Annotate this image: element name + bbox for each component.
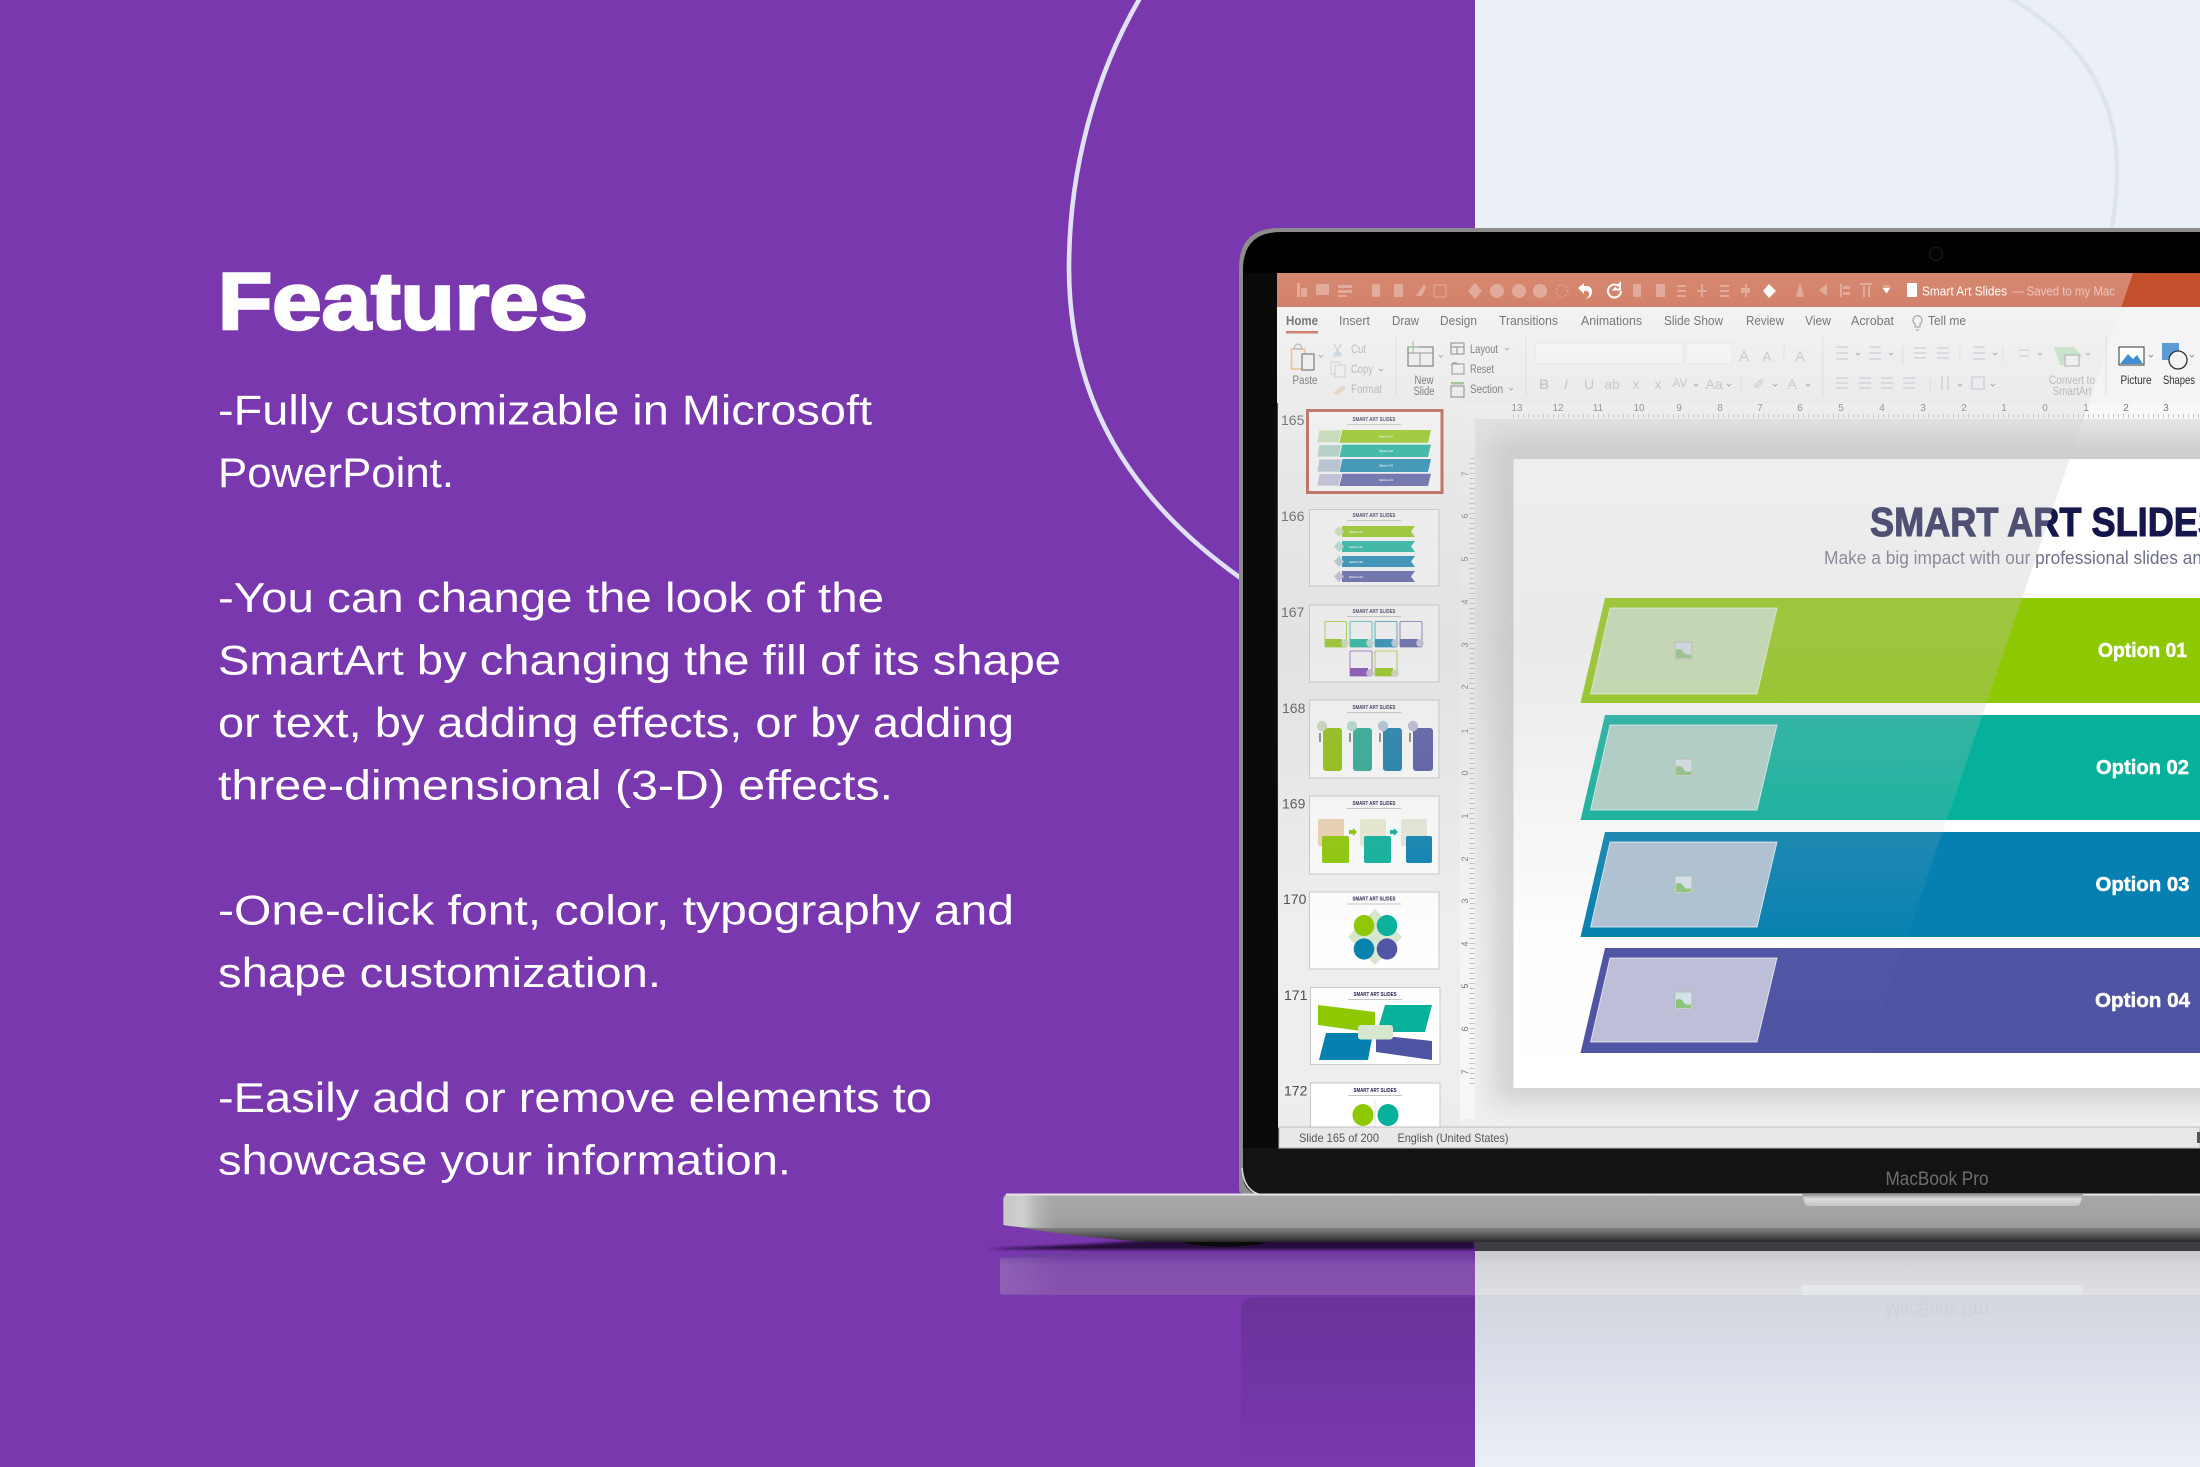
ribbon tabs: Review bbox=[1746, 313, 1785, 328]
font group: U bbox=[1584, 376, 1594, 392]
thumbnail 165: Option 02 bbox=[1379, 449, 1393, 453]
text block: feature list: shape customization. bbox=[218, 949, 661, 996]
thumb notch bbox=[1802, 1194, 2083, 1206]
font group: A bbox=[1763, 349, 1772, 364]
font group: B bbox=[1539, 376, 1549, 392]
ribbon tabs: Slide Show bbox=[1664, 313, 1724, 328]
vertical ruler: 2 bbox=[1460, 684, 1470, 690]
thumbnail 165: Option 03 bbox=[1379, 464, 1393, 468]
paragraph group bbox=[1836, 347, 2029, 390]
ribbon tabs: Transitions bbox=[1499, 313, 1558, 328]
text block: feature list: SmartArt by changing the fill of its shape bbox=[218, 636, 1061, 684]
laptop base bbox=[985, 1194, 2200, 1251]
horizontal ruler: 4 bbox=[1879, 403, 1885, 414]
camera bbox=[1930, 248, 1942, 260]
thumbnail 168: SMART ART SLIDES bbox=[1352, 705, 1396, 711]
thumbnail 168 bbox=[1310, 700, 1439, 778]
font group: I bbox=[1564, 376, 1568, 392]
horizontal ruler: 9 bbox=[1676, 403, 1682, 414]
thumbnail 170 bbox=[1310, 892, 1439, 969]
font group: A bbox=[1739, 348, 1749, 365]
ribbon tabs: Tell me bbox=[1928, 313, 1966, 328]
curve: pale outline on light panel bbox=[2010, 0, 2117, 232]
ribbon tabs: Draw bbox=[1392, 313, 1420, 328]
slides group: Section bbox=[1470, 384, 1503, 396]
slide numbers: 168 bbox=[1282, 700, 1306, 716]
horizontal ruler: 0 bbox=[2042, 403, 2048, 414]
thumbnail 167: SMART ART SLIDES bbox=[1352, 609, 1396, 615]
slide numbers: 170 bbox=[1283, 891, 1307, 907]
slides group: Layout bbox=[1470, 344, 1499, 356]
thumbnail 166: Option 01 bbox=[1349, 530, 1363, 534]
vertical ruler: 3 bbox=[1460, 898, 1470, 904]
slide numbers: 167 bbox=[1281, 604, 1305, 620]
text block: feature list: -One-click font, color, typography and bbox=[218, 886, 1014, 934]
band: option 02 bbox=[1580, 715, 2200, 820]
status bar: Slide 165 of 200 bbox=[1299, 1131, 1379, 1145]
vertical ruler: 4 bbox=[1460, 599, 1470, 605]
slides group: Slide bbox=[1414, 386, 1434, 398]
ribbon chevrons bbox=[1319, 348, 2194, 390]
text block: feature list bbox=[218, 386, 1061, 1184]
status bar: English (United States) bbox=[1398, 1131, 1508, 1145]
curve: white outline on purple bbox=[1069, 0, 1242, 579]
horizontal ruler: 6 bbox=[1797, 403, 1803, 414]
vertical ruler: 5 bbox=[1460, 556, 1470, 562]
horizontal ruler: 8 bbox=[1717, 403, 1723, 414]
title bar: — Saved to my Mac bbox=[2012, 284, 2115, 298]
thumbnail 171 bbox=[1310, 988, 1440, 1064]
thumbnail 166 bbox=[1310, 510, 1439, 586]
font group: ab bbox=[1604, 376, 1620, 392]
thumbnail 171: SMART ART SLIDES bbox=[1354, 992, 1397, 998]
band: option 04 bbox=[1580, 948, 2200, 1053]
heading: Features: Features bbox=[218, 257, 588, 347]
slide numbers: 165 bbox=[1281, 412, 1305, 428]
horizontal ruler: 5 bbox=[1838, 403, 1844, 414]
slide numbers bbox=[1281, 412, 1308, 1098]
clipboard group bbox=[1292, 344, 1383, 396]
horizontal ruler: 2 bbox=[1961, 403, 1967, 414]
thumbnail 172: SMART ART SLIDES bbox=[1354, 1088, 1397, 1094]
ribbon tabs: Insert bbox=[1339, 313, 1370, 328]
horizontal ruler: 13 bbox=[1511, 403, 1523, 414]
vertical ruler bbox=[1460, 419, 1475, 1119]
text block: feature list: showcase your information. bbox=[218, 1136, 791, 1184]
font group: AV bbox=[1672, 376, 1688, 390]
vertical ruler: 6 bbox=[1460, 513, 1470, 519]
base top slab bbox=[1003, 1194, 2200, 1228]
vertical ruler: 7 bbox=[1460, 471, 1470, 477]
band: option 01 bbox=[1580, 598, 2200, 703]
horizontal ruler: 1 bbox=[2083, 403, 2089, 414]
text block: feature list: PowerPoint. bbox=[218, 449, 454, 496]
vertical ruler: 5 bbox=[1460, 983, 1470, 989]
vertical ruler: 0 bbox=[1460, 770, 1470, 776]
font group: Aa bbox=[1705, 376, 1723, 392]
ribbon tabs: Acrobat bbox=[1851, 313, 1894, 328]
slide numbers: 172 bbox=[1284, 1082, 1308, 1098]
thumbnail 166: Option 02 bbox=[1349, 545, 1363, 549]
main slide bbox=[1514, 459, 2200, 1088]
icon: tell me bulb bbox=[1913, 316, 1922, 330]
thumbnail sidebar bbox=[1278, 403, 1460, 1128]
horizontal ruler: 10 bbox=[1633, 403, 1645, 414]
slides group bbox=[1407, 341, 1503, 398]
horizontal ruler: 3 bbox=[2163, 403, 2169, 414]
thumbnail 165: Option 01 bbox=[1379, 434, 1393, 438]
clipboard group: Paste bbox=[1292, 373, 1318, 387]
thumbnail 166: Option 04 bbox=[1349, 575, 1363, 579]
vertical ruler: 3 bbox=[1460, 642, 1470, 648]
thumbnail 165: SMART ART SLIDES bbox=[1352, 417, 1396, 423]
band: option 04: Option 04 bbox=[2095, 990, 2191, 1012]
ribbon tabs bbox=[1286, 313, 1966, 328]
horizontal ruler: 7 bbox=[1757, 403, 1763, 414]
vertical ruler: 7 bbox=[1460, 1069, 1470, 1075]
laptop lid bbox=[1239, 228, 2200, 1196]
slide numbers: 166 bbox=[1281, 508, 1305, 524]
background: purple panel bbox=[0, 0, 1475, 1467]
thumbnail 166: Option 03 bbox=[1349, 560, 1363, 564]
font group bbox=[1535, 343, 1805, 392]
vertical ruler: 2 bbox=[1460, 856, 1470, 862]
thumbnail 170: SMART ART SLIDES bbox=[1352, 896, 1396, 902]
font group: A bbox=[1787, 376, 1797, 392]
MacBook Pro label: MacBook Pro bbox=[1886, 1169, 1988, 1190]
thumbnail 172 bbox=[1310, 1083, 1440, 1127]
text block: feature list: -Easily add or remove elements to bbox=[218, 1074, 932, 1121]
ribbon bbox=[1277, 307, 2200, 403]
slide numbers: 171 bbox=[1284, 987, 1308, 1003]
screen: PowerPoint window bbox=[1277, 273, 2200, 1148]
horizontal ruler: 1 bbox=[2001, 403, 2007, 414]
horizontal ruler bbox=[1460, 403, 2200, 419]
convert to SmartArt: SmartArt bbox=[2052, 386, 2092, 398]
thumbnail 165 bbox=[1308, 410, 1442, 492]
glass reflection on screen bbox=[1277, 273, 2133, 1148]
clipboard group: Format bbox=[1351, 384, 1383, 396]
laptop reflection on the desk bbox=[1000, 1250, 2200, 1467]
vertical ruler: 1 bbox=[1460, 728, 1470, 734]
slide numbers: 169 bbox=[1282, 796, 1306, 812]
text block: feature list: three-dimensional (3-D) effects. bbox=[218, 762, 893, 808]
slide workspace bbox=[1460, 403, 2200, 1128]
active tab underline bbox=[1286, 331, 1318, 334]
rubber foot bbox=[1183, 1236, 1267, 1246]
ribbon tabs: Home bbox=[1286, 313, 1318, 328]
clipboard group: Cut bbox=[1351, 344, 1367, 356]
clipboard group: Copy bbox=[1351, 364, 1373, 376]
text block: feature list: -Fully customizable in Microsoft bbox=[218, 386, 872, 434]
band: option 03: Option 03 bbox=[2096, 874, 2190, 896]
desk shadow bbox=[985, 1240, 1475, 1250]
horizontal ruler: 2 bbox=[2123, 403, 2129, 414]
vertical ruler: 1 bbox=[1460, 813, 1470, 819]
vertical ruler: 6 bbox=[1460, 1026, 1470, 1032]
band: option 02: Option 02 bbox=[2096, 757, 2189, 779]
picture and shapes: Picture bbox=[2120, 373, 2152, 387]
font group: ✐ bbox=[1753, 376, 1765, 392]
text block: feature list: or text, by adding effects, or by adding bbox=[218, 699, 1014, 746]
thumbnail 169 bbox=[1310, 796, 1439, 874]
font group: x bbox=[1632, 376, 1640, 392]
icon: paste bbox=[1292, 344, 1314, 370]
ribbon tabs: View bbox=[1805, 313, 1832, 328]
font group: x bbox=[1654, 376, 1662, 392]
band: option 01: Option 01 bbox=[2098, 640, 2187, 662]
ribbon tabs: Animations bbox=[1581, 313, 1642, 328]
band: option 03 bbox=[1580, 832, 2200, 937]
thumbnail 169: SMART ART SLIDES bbox=[1352, 801, 1396, 807]
text block: feature list: -You can change the look of the bbox=[218, 574, 884, 621]
slides group: New bbox=[1414, 375, 1434, 387]
horizontal ruler: 3 bbox=[1920, 403, 1926, 414]
title bar bbox=[1277, 273, 2200, 307]
title bar: Smart Art Slides bbox=[1922, 284, 2007, 298]
base underside bbox=[1003, 1224, 2200, 1242]
slides group: Reset bbox=[1470, 364, 1495, 376]
convert to SmartArt: Convert to bbox=[2049, 375, 2095, 387]
ribbon tabs: Design bbox=[1440, 313, 1477, 328]
laptop reflection on the desk: MacBook Pro bbox=[1886, 1298, 1988, 1319]
status bar bbox=[1279, 1127, 2200, 1148]
thumbnail 166: SMART ART SLIDES bbox=[1352, 513, 1396, 519]
font group: A bbox=[1795, 348, 1805, 364]
main slide shadow bbox=[1492, 436, 2200, 1104]
horizontal ruler: 11 bbox=[1593, 403, 1604, 414]
convert to SmartArt bbox=[2049, 347, 2095, 398]
vertical ruler: 4 bbox=[1460, 941, 1470, 947]
background: light panel bbox=[1475, 0, 2200, 1467]
thumbnail 167 bbox=[1310, 605, 1439, 682]
picture and shapes bbox=[2119, 343, 2195, 387]
thumbnail 165: Option 04 bbox=[1379, 478, 1393, 482]
horizontal ruler: 12 bbox=[1552, 403, 1564, 414]
document name bbox=[1907, 283, 1917, 297]
